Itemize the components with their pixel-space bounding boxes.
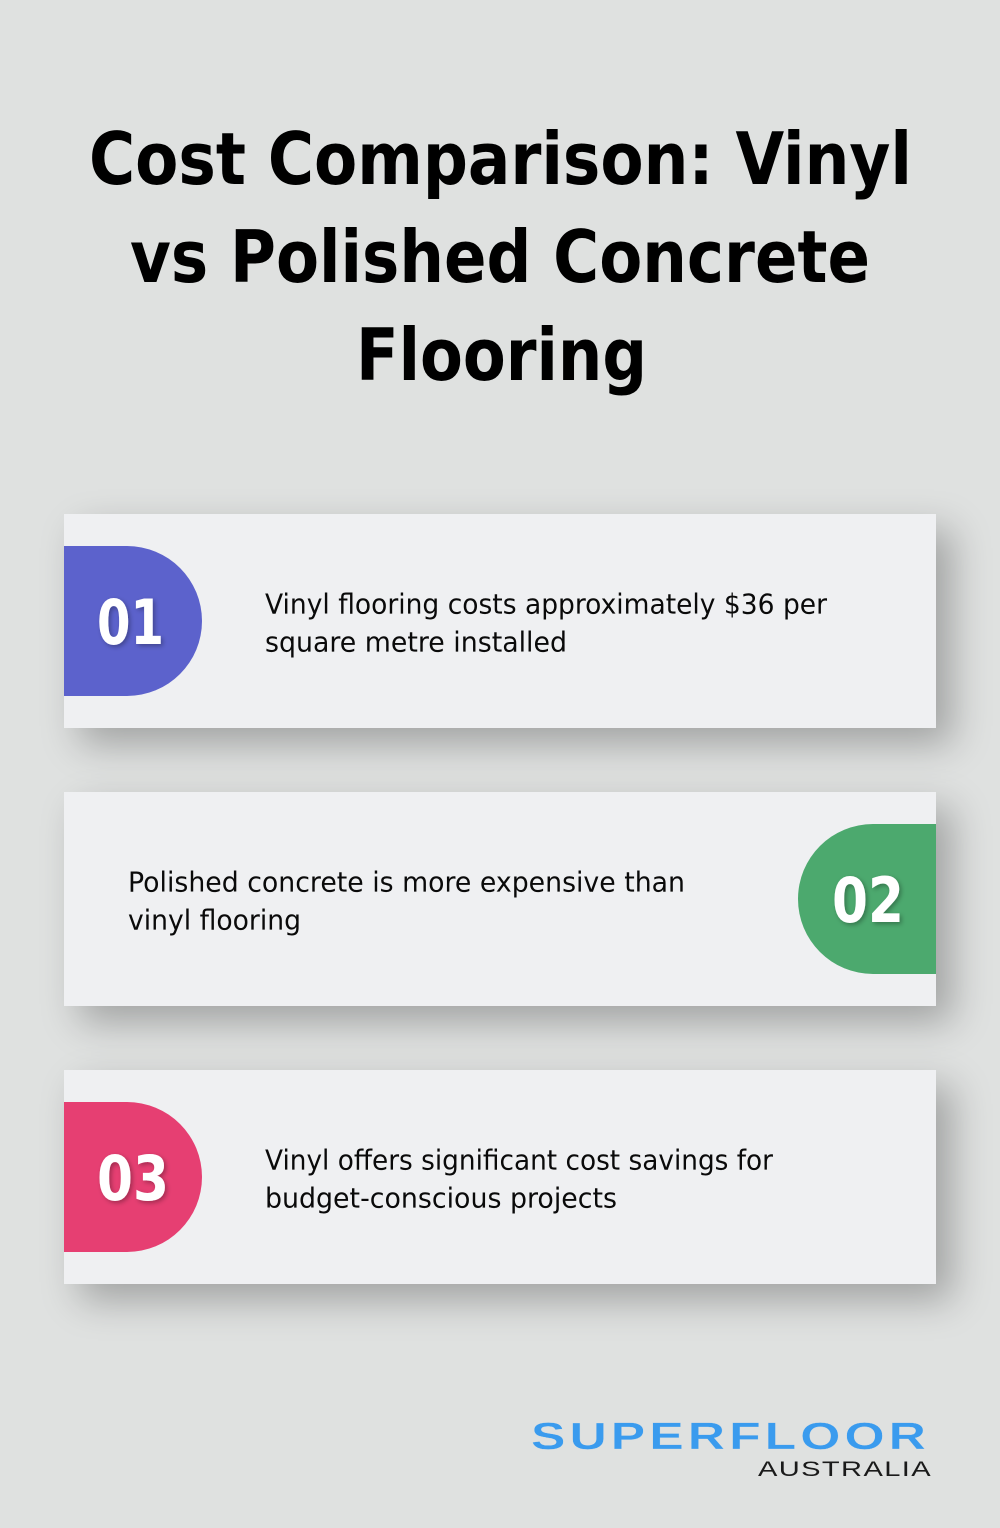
badge 03: 03 — [97, 1142, 169, 1215]
title — [89, 117, 912, 397]
text: card 1 — [265, 588, 827, 658]
badge 01 — [64, 546, 202, 696]
text: card 1: square metre installed — [265, 626, 567, 658]
badge 02: 02 — [832, 864, 904, 937]
text: card 3: budget-conscious projects — [265, 1182, 617, 1214]
panel: card 2 — [64, 792, 936, 1006]
logo: SUPERFLOOR — [531, 1416, 930, 1458]
badge 01: 01 — [97, 586, 164, 659]
text: card 2: Polished concrete is more expensive than — [128, 866, 685, 898]
panel: card 3 — [64, 1070, 936, 1284]
title: Flooring — [356, 313, 647, 397]
text: card 3: Vinyl offers significant cost savings for — [265, 1144, 773, 1176]
badge 03 — [64, 1102, 202, 1252]
badge 02 — [798, 824, 936, 974]
text: card 2 — [128, 866, 685, 936]
panel: card 1 — [64, 514, 936, 728]
text: card 3 — [265, 1144, 773, 1214]
text: card 1: Vinyl flooring costs approximately $36 per — [265, 588, 827, 620]
logo — [531, 1416, 932, 1481]
title: vs Polished Concrete — [130, 215, 870, 299]
text: card 2: vinyl flooring — [128, 904, 301, 936]
logo: AUSTRALIA — [758, 1458, 932, 1481]
